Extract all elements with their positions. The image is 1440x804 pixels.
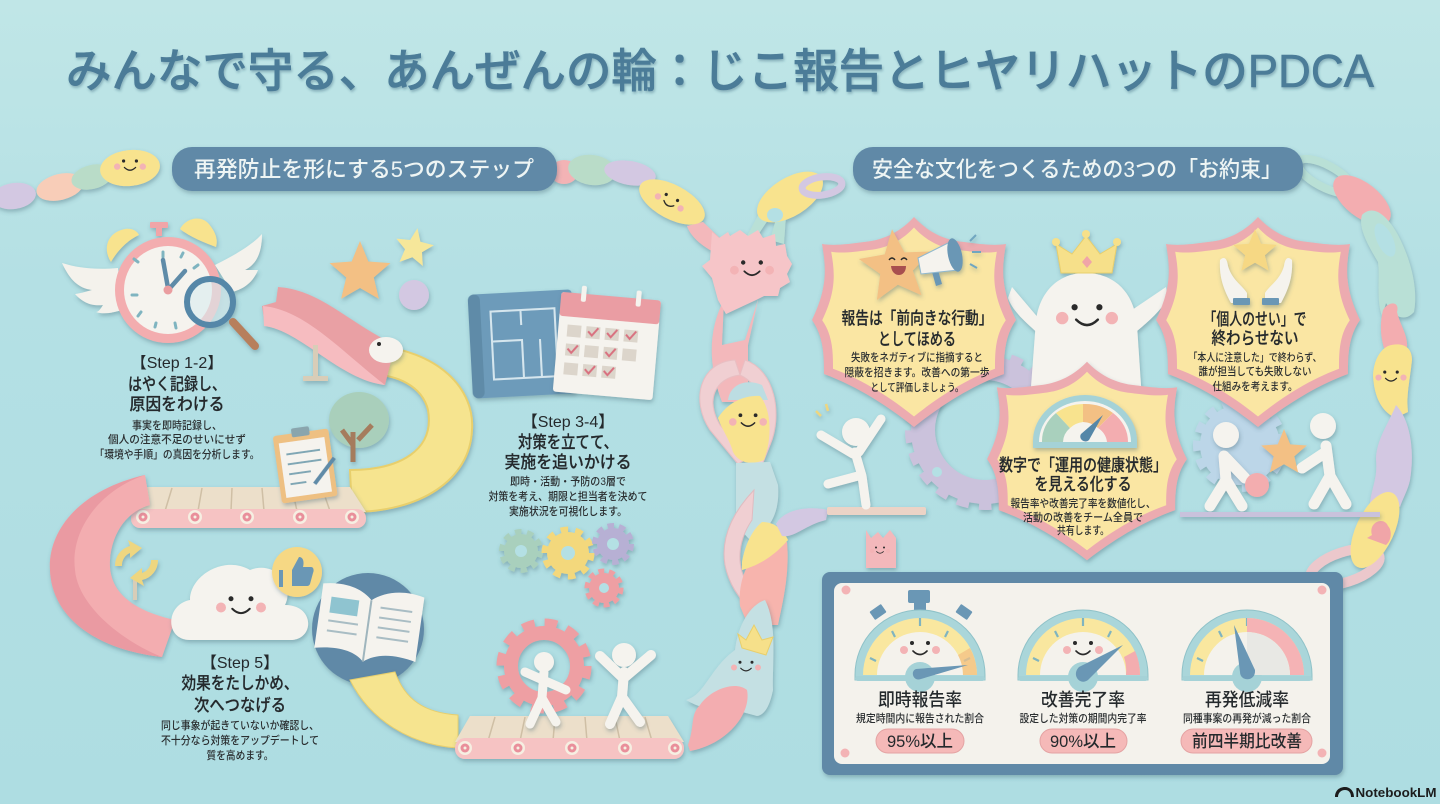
text: step 5: 不十分なら対策をアップデートして [161,733,319,747]
panel: KPI board [822,572,1343,775]
icon: cycle arrows [115,540,158,600]
metric: improvement completion rate: 設定した対策の期間内完了率 [1020,711,1146,725]
panel: promise 3: 報告率や改善完了率を数値化し、 [1010,496,1156,510]
face icons on left chain [114,159,774,426]
text: step 3-4: 対策を考え、期限と担当者を決めて [488,489,648,503]
icon: open book [312,573,425,685]
header: promises: 安全な文化をつくるための3つの「お約束」 [872,157,1282,182]
people and platforms [816,404,1380,568]
light blue gear [1198,403,1282,487]
icon: blueprint [468,289,577,399]
yellow slide bottom [350,672,458,748]
left pink curved slide [50,475,175,657]
panel: promise 3: 活動の改善をチーム全員で [1023,510,1143,524]
gauge: immediate report rate [855,590,985,692]
icon: hands holding star [1220,229,1292,305]
panel: promise 2: 仕組みを考えます。 [1212,379,1298,393]
gauge: improvement completion rate [1018,610,1148,692]
metric: immediate report rate: 規定時間内に報告された割合 [856,711,984,725]
panel: promise 1: としてほめる [878,330,956,349]
title: みんなで守る、あんぜんの輪：じこ報告とヒヤリハットのPDCA [66,45,1374,97]
metric: recurrence reduction rate [1181,690,1312,753]
icon: smiling cloud [171,565,308,640]
text: step 3-4 [488,414,648,518]
text: step 1-2: はやく記録し、 [128,375,226,394]
icon: thumbs up badge [272,547,322,597]
metric: improvement completion rate [1020,690,1146,753]
text: step 1-2: 【Step 1-2】 [131,355,223,372]
conveyor belt bottom [455,716,684,759]
metric: improvement completion rate: 改善完了率 [1041,690,1125,710]
pink slide [262,287,403,385]
icon: star with megaphone [856,225,981,301]
text: step 3-4: 【Step 3-4】 [522,414,614,431]
watermark: NotebookLM: NotebookLM [1356,786,1436,800]
left paper chain [0,147,843,625]
panel: promise 3: を見える化する [1034,475,1132,494]
text: step 1-2 [94,355,260,461]
right paper chain [1293,152,1415,592]
icon: calendar [553,284,662,400]
metric: recurrence reduction rate: 前四半期比改善 [1192,732,1302,751]
panel: promise 3: 共有します。 [1057,523,1109,537]
text: step 5: 質を高めます。 [206,748,274,762]
text: step 3-4: 実施状況を可視化します。 [509,504,627,518]
yellow curved slide [350,345,472,512]
icon: clipboard [272,423,340,504]
panel: promise 2: 終わらせない [1212,329,1298,348]
panel: promise 2: 「個人のせい」で [1204,310,1306,329]
text: step 5 [161,655,319,762]
metric: immediate report rate: 95%以上 [887,732,953,751]
conveyor belt top [131,487,366,528]
header: steps: 再発防止を形にする5つのステップ [194,157,534,182]
metric: immediate report rate: 即時報告率 [878,690,962,710]
icon: tree [329,392,389,462]
panel: promise 1: 報告は「前向きな行動」 [842,309,992,328]
gauge: recurrence reduction rate [1182,610,1312,692]
text: step 3-4: 対策を立てて、 [518,433,618,452]
icon: stars and dot [330,225,436,310]
panel: promise 1: として評価しましょう。 [870,380,964,394]
text: step 1-2: 事実を即時記録し、 [132,418,222,432]
panel: promise 2 [1156,217,1360,427]
icon: pink gear with person [503,625,585,724]
panel: promise 1: 隠蔽を招きます。改善への第一歩 [844,365,990,379]
text: step 5: 次へつなげる [194,696,286,715]
face icon on right chain [1375,371,1407,381]
metric: improvement completion rate: 90%以上 [1050,732,1116,751]
panel: promise 1: 失敗をネガティブに指摘すると [851,350,983,364]
header: promises [853,147,1303,191]
panel: promise 2: 誰が担当しても失敗しない [1198,364,1312,378]
lilac gear [911,356,1059,504]
text: step 3-4: 即時・活動・予防の3層で [510,474,626,488]
icon: small gears [503,527,630,604]
icon: health gauge [1033,395,1137,448]
text: step 1-2: 原因をわける [130,395,224,414]
metric: recurrence reduction rate: 再発低減率 [1205,690,1289,710]
crowned-ghost chain end [686,600,774,751]
icon: crowned mascot [1008,230,1168,400]
header: steps [172,147,557,191]
text: step 3-4: 実施を追いかける [504,453,632,472]
panel: promise 2: 「本人に注意した」で終わらず、 [1188,350,1322,364]
text: step 1-2: 「環境や手順」の真因を分析します。 [94,447,260,461]
metric: recurrence reduction rate: 同種事案の再発が減った割合 [1183,711,1311,725]
text: step 5: 【Step 5】 [201,655,279,672]
text: step 5: 同じ事象が起きていないか確認し、 [161,718,319,732]
icon: cheering person [600,643,651,724]
text: step 1-2: 個人の注意不足のせいにせず [108,432,246,446]
panel: promise 1 [812,217,1016,427]
icon: winged clock [62,218,262,346]
metric: immediate report rate [856,690,984,753]
panel: promise 3: 数字で「運用の健康状態」 [999,456,1167,475]
text: step 5: 効果をたしかめ、 [182,674,298,693]
panel: promise 3 [987,362,1187,560]
